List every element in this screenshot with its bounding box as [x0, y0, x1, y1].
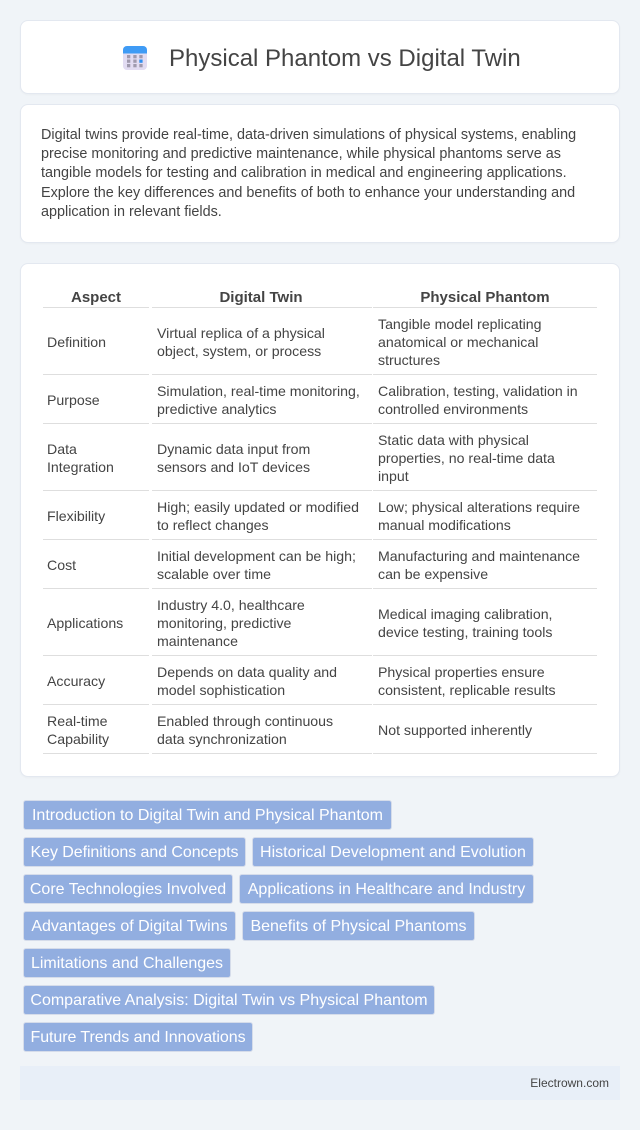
- row: Cost: can be expensive: [378, 566, 488, 582]
- row: Applications: Applications: [47, 615, 123, 631]
- row: Data Integration: sensors and IoT devices: [157, 459, 310, 475]
- panel: intro text: precise monitoring and predictive maintenance, while physical phantoms serve as: [41, 146, 561, 162]
- row: Data Integration: Data: [47, 441, 77, 457]
- tag: [23, 985, 435, 1015]
- row: Real-time Capability: Not supported inherently: [378, 722, 532, 738]
- row: Accuracy: Accuracy: [47, 673, 105, 689]
- tag: [23, 837, 246, 867]
- row: Applications: Medical imaging calibration,: [378, 606, 552, 622]
- row: Cost: Initial development can be high;: [157, 548, 356, 564]
- row: Data Integration: properties, no real-time data: [378, 450, 555, 466]
- row: Accuracy: Depends on data quality and: [157, 664, 337, 680]
- panel: intro text: Digital twins provide real-time, data-driven simulations of physical systems, enabling: [41, 127, 576, 143]
- row: Definition: Tangible model replicating: [378, 316, 542, 332]
- row: Cost: [47, 548, 580, 582]
- tag: Historical Development and Evolution: [260, 844, 526, 861]
- panel: intro text: Explore the key differences and benefits of both to enhance your understanding and: [41, 185, 575, 201]
- row: Cost: scalable over time: [157, 566, 271, 582]
- row: Applications: [47, 597, 553, 649]
- row: Flexibility: Flexibility: [47, 508, 105, 524]
- row: Definition: object, system, or process: [157, 343, 321, 359]
- row: Data Integration: input: [378, 468, 409, 484]
- row: Applications: monitoring, predictive: [157, 615, 291, 631]
- tag: [23, 948, 231, 978]
- tag: Advantages of Digital Twins: [31, 918, 228, 935]
- row: Data Integration: Dynamic data input from: [157, 441, 310, 457]
- row: Definition: [47, 316, 542, 368]
- row: Purpose: Simulation, real-time monitoring,: [157, 383, 360, 399]
- row: Purpose: Calibration, testing, validation in: [378, 383, 578, 399]
- tag: Core Technologies Involved: [30, 881, 226, 898]
- panel: comparison table: [20, 263, 620, 777]
- panel: intro text: tangible models for testing and calibration in medical and engineering applications.: [41, 165, 567, 181]
- row: Definition: structures: [378, 352, 440, 368]
- tag: [252, 837, 534, 867]
- row: Real-time Capability: data synchronization: [157, 731, 287, 747]
- row: Flexibility: High; easily updated or modified: [157, 499, 359, 515]
- table header: Digital Twin: [219, 289, 303, 306]
- row: Data Integration: Static data with physical: [378, 432, 529, 448]
- tag: Introduction to Digital Twin and Physical Phantom: [32, 807, 383, 824]
- table header: Aspect: [71, 289, 121, 306]
- tag: Limitations and Challenges: [31, 955, 223, 972]
- row: Flexibility: to reflect changes: [157, 517, 269, 533]
- tag: [23, 1022, 253, 1052]
- tag: Benefits of Physical Phantoms: [250, 918, 467, 935]
- tag: Key Definitions and Concepts: [31, 844, 238, 861]
- row: Data Integration: Integration: [47, 459, 114, 475]
- row: Applications: device testing, training tools: [378, 624, 553, 640]
- row: Real-time Capability: Real-time: [47, 713, 108, 729]
- table header: Physical Phantom: [420, 289, 550, 306]
- row: Accuracy: [47, 664, 556, 698]
- row: Definition: anatomical or mechanical: [378, 334, 538, 350]
- row: Purpose: controlled environments: [378, 401, 528, 417]
- tag: [23, 800, 392, 830]
- row: Flexibility: manual modifications: [378, 517, 511, 533]
- icon: calendar: [123, 46, 147, 70]
- row: Flexibility: Low; physical alterations require: [378, 499, 580, 515]
- tag: Applications in Healthcare and Industry: [248, 881, 525, 898]
- panel: topic tags: [23, 800, 534, 1052]
- table header: [71, 289, 550, 306]
- row: Data Integration: [47, 432, 555, 484]
- panel: intro text: application in relevant fields.: [41, 204, 222, 220]
- panel: intro text: [20, 104, 620, 243]
- row: Accuracy: Physical properties ensure: [378, 664, 545, 680]
- tag: [23, 911, 236, 941]
- row: Accuracy: model sophistication: [157, 682, 285, 698]
- row: Purpose: [47, 383, 578, 417]
- title: Physical Phantom vs Digital Twin: [169, 45, 521, 72]
- row: Definition: Definition: [47, 334, 106, 350]
- row: Real-time Capability: [47, 713, 532, 747]
- row: Purpose: Purpose: [47, 392, 100, 408]
- row: Real-time Capability: Enabled through continuous: [157, 713, 333, 729]
- row: Accuracy: consistent, replicable results: [378, 682, 556, 698]
- row: Applications: maintenance: [157, 633, 238, 649]
- row: Cost: Cost: [47, 557, 76, 573]
- header card: [20, 20, 620, 94]
- row: Cost: Manufacturing and maintenance: [378, 548, 580, 564]
- tag: Comparative Analysis: Digital Twin vs Physical Phantom: [30, 992, 428, 1009]
- row: Applications: Industry 4.0, healthcare: [157, 597, 305, 613]
- footer credit: Electrown.com: [530, 1076, 609, 1090]
- footer: [20, 1066, 620, 1100]
- row: Definition: Virtual replica of a physical: [157, 325, 325, 341]
- row: Real-time Capability: Capability: [47, 731, 109, 747]
- row: Purpose: predictive analytics: [157, 401, 276, 417]
- tag: [242, 911, 475, 941]
- row: Flexibility: [47, 499, 580, 533]
- tag: [239, 874, 534, 904]
- tag: Future Trends and Innovations: [30, 1029, 246, 1046]
- tag: [23, 874, 233, 904]
